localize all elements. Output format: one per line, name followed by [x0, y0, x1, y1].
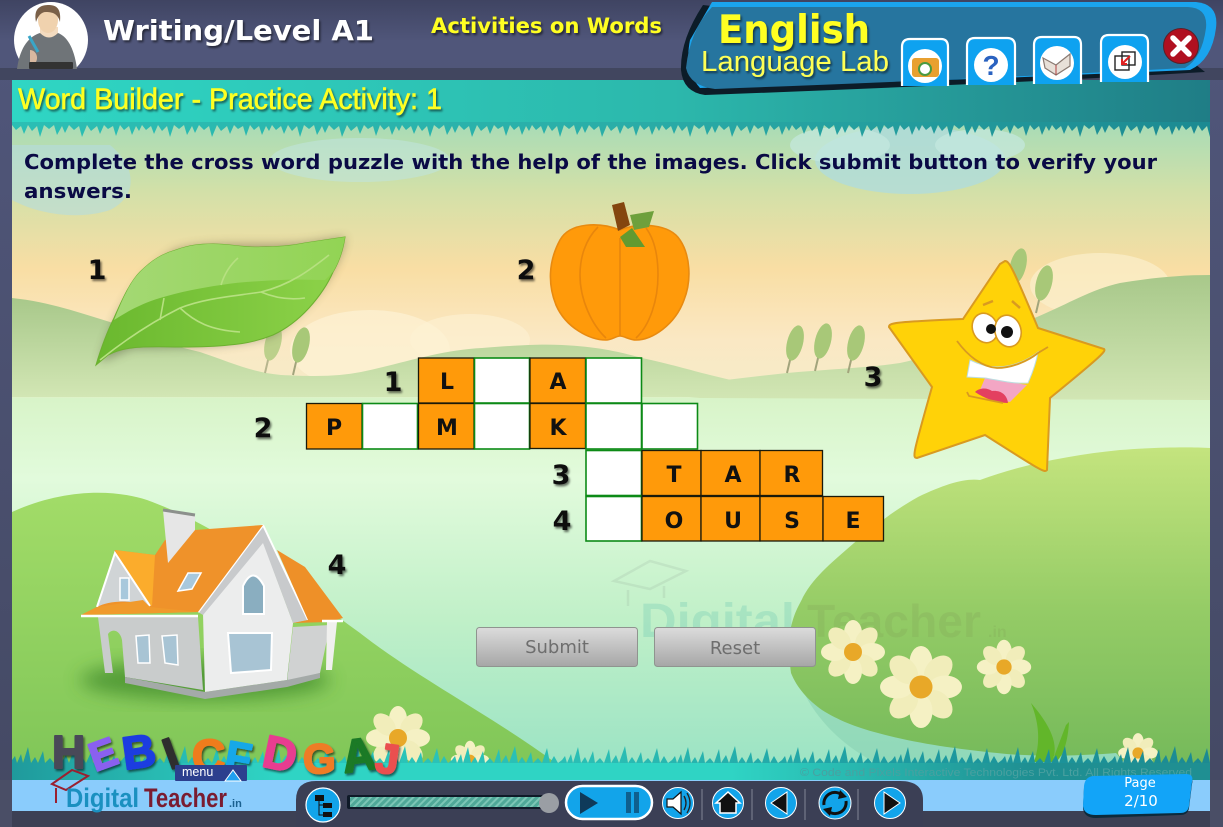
icon: volume	[662, 788, 694, 818]
row 1: L A	[418, 358, 642, 403]
progress slider	[347, 793, 559, 813]
row 2: P M K: M	[436, 416, 458, 441]
number 2: 2	[517, 255, 535, 286]
heading: Word Builder practice activity: Word Builder - Practice Activity: 1	[18, 83, 442, 116]
clue image 3: smiling star	[889, 261, 1104, 471]
logo: Digital Teacher: .in	[229, 798, 242, 810]
decorative alphabet letters	[52, 723, 402, 784]
copyright text: © Code and Pixels Interactive Technologies Pvt. Ltd. All Rights Reserved	[800, 767, 1192, 779]
row 4: O U S E: E	[845, 509, 861, 534]
number 1: 1	[88, 255, 106, 286]
decorative alphabet letters: C	[192, 730, 225, 782]
row 3: T A R	[586, 450, 822, 496]
bottom grass and teal strip	[12, 745, 1210, 780]
decorative alphabet letters: E	[83, 730, 123, 780]
icon button: window resize	[1100, 34, 1149, 82]
crossword numbers: 4	[553, 506, 571, 537]
row 4: O U S E: S	[784, 509, 800, 534]
watermark: Digital Teacher: Teacher	[807, 595, 981, 647]
crossword numbers: 1	[384, 367, 402, 398]
icon: next	[874, 788, 906, 818]
decorative alphabet letters: F	[222, 732, 255, 783]
title: English: English	[718, 8, 870, 53]
top grass fringe	[12, 122, 1210, 138]
flowers	[366, 620, 1158, 779]
decorative alphabet letters: G	[303, 735, 336, 782]
decorative alphabet letters: A	[339, 727, 379, 783]
page counter: Page	[1124, 776, 1156, 791]
page counter	[1083, 774, 1192, 818]
crossword puzzle	[306, 358, 884, 541]
media control bar	[296, 781, 923, 827]
header band: activity title strip	[12, 80, 1210, 123]
number 3: 3	[864, 362, 882, 393]
row 1: L A: A	[549, 370, 567, 395]
logo: Digital Teacher	[52, 770, 242, 813]
instructions text block: answers.	[24, 179, 132, 203]
crossword numbers: 2	[254, 413, 272, 444]
row 3: T A R: R	[784, 463, 801, 488]
row 2: P M K: P	[326, 416, 342, 441]
button: Submit: Submit	[525, 637, 589, 658]
icon: menu tree	[306, 788, 340, 822]
row 4: O U S E	[586, 496, 884, 541]
row 4: O U S E: O	[665, 509, 683, 534]
icon button: help	[966, 37, 1016, 85]
button: Reset: Reset	[710, 638, 760, 659]
heading: Writing/Level A1: Writing/Level A1	[103, 14, 374, 47]
watermark: Digital Teacher: .in	[988, 624, 1007, 641]
decorative alphabet letters: D	[259, 725, 302, 783]
watermark: Digital Teacher: Digital	[640, 595, 795, 648]
icon button: folder clock	[901, 38, 949, 86]
footer bar	[0, 780, 1223, 827]
row 1: L A: L	[440, 370, 454, 395]
menu tab	[175, 765, 247, 781]
clue image 1: leaf	[96, 237, 345, 365]
play pause pill	[566, 786, 652, 819]
clue image 4: house	[80, 510, 343, 700]
decorative alphabet letters: B	[119, 723, 159, 780]
instructions text block: Complete the cross word puzzle with the help of the images. Click submit button to verify your	[24, 150, 1158, 174]
watermark: Digital Teacher	[614, 561, 1007, 648]
row 3: T A R: A	[724, 463, 742, 488]
row 3: T A R: T	[666, 463, 682, 488]
logo: Digital Teacher: Digital	[66, 783, 139, 813]
page counter: 2/10	[1124, 792, 1158, 810]
menu tab: menu	[182, 765, 213, 779]
button: Submit	[476, 628, 638, 666]
row 4: O U S E: U	[724, 509, 742, 534]
icon: previous	[766, 788, 796, 818]
icon button: book	[1033, 36, 1082, 84]
crossword numbers: 3	[552, 460, 570, 491]
logo: Digital Teacher: Teacher	[144, 783, 227, 813]
avatar: student writing	[14, 2, 88, 69]
panel: English Language Lab badge	[681, 2, 1216, 95]
heading: Activities on Words: Activities on Words	[431, 14, 662, 38]
clue image 2: pumpkin	[550, 202, 689, 340]
decorative alphabet letters: I	[157, 729, 185, 779]
decorative alphabet letters: J	[373, 734, 402, 784]
scenery: green hills	[12, 447, 1210, 770]
icon: reload	[819, 787, 851, 819]
decorative alphabet letters: H	[52, 726, 85, 778]
row 2: P M K	[306, 404, 698, 449]
row 2: P M K: K	[549, 416, 567, 441]
instructions text block	[24, 150, 1158, 203]
scenery: trees	[261, 247, 1056, 375]
number 4: 4	[328, 550, 346, 581]
subtitle: Language Lab: Language Lab	[701, 46, 889, 78]
icon button: help: ?	[982, 50, 1000, 81]
button: Reset	[654, 628, 816, 666]
crossword numbers	[254, 367, 571, 537]
icon button: close	[1164, 28, 1198, 64]
icon: home	[712, 788, 744, 818]
